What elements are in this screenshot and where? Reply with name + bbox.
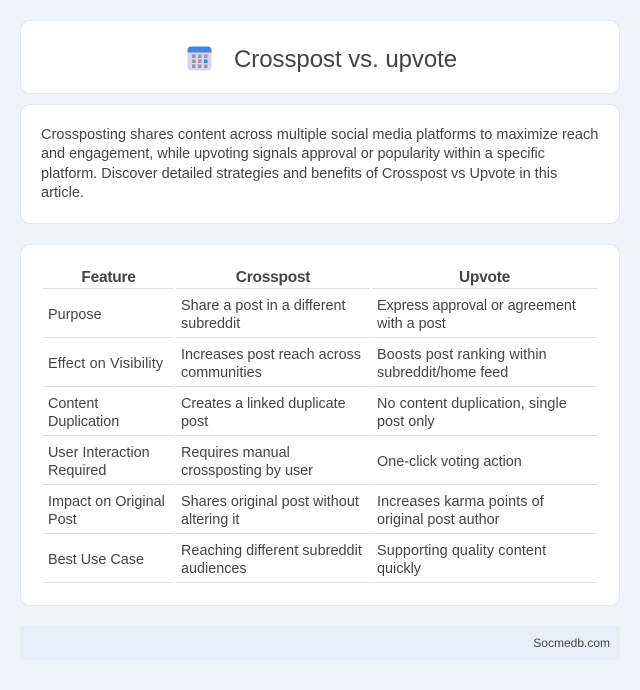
icon: calendar [188, 46, 212, 70]
row: Purpose: with a post [377, 316, 446, 332]
intro text: Crossposting shares content across multiple social media platforms to maximize reach [41, 126, 598, 142]
panel: intro text card [20, 104, 620, 224]
row: Best Use Case: Supporting quality content [377, 543, 546, 559]
row: User Interaction Required: User Interaction [48, 445, 150, 461]
row: Impact on Original Post: Impact on Original [48, 494, 165, 510]
table header row: Feature [81, 269, 136, 286]
row: Impact on Original Post: Shares original post without [181, 494, 359, 510]
table header row [81, 269, 510, 286]
row: User Interaction Required: Required [48, 463, 106, 479]
row: Best Use Case: audiences [181, 561, 247, 577]
row: Content Duplication: post only [377, 414, 435, 430]
title: Crosspost vs. upvote [234, 46, 457, 72]
row: Content Duplication: post [181, 414, 208, 430]
row: Effect on Visibility: Effect on Visibility [48, 356, 163, 372]
intro text: article. [41, 185, 84, 201]
footer bar [20, 626, 620, 660]
row: Effect on Visibility [48, 347, 547, 381]
row: User Interaction Required: Requires manual [181, 445, 290, 461]
intro text [41, 126, 598, 201]
row: Content Duplication: Content [48, 396, 98, 412]
row: Impact on Original Post: altering it [181, 512, 239, 528]
row: User Interaction Required [48, 445, 522, 479]
panel: title card [20, 20, 620, 94]
row: Content Duplication: No content duplication, single [377, 396, 567, 412]
row: Purpose: Purpose [48, 307, 102, 323]
row: Best Use Case [48, 543, 546, 577]
row: Purpose: Express approval or agreement [377, 298, 576, 314]
row: Best Use Case: Reaching different subreddit [181, 543, 362, 559]
row: Purpose: subreddit [181, 316, 240, 332]
row: Effect on Visibility: Increases post reach across [181, 347, 361, 363]
row: Effect on Visibility: Boosts post ranking within [377, 347, 547, 363]
row: Purpose: Share a post in a different [181, 298, 346, 314]
row: Effect on Visibility: communities [181, 365, 262, 381]
table header row: Crosspost [236, 269, 310, 286]
row: Impact on Original Post: Post [48, 512, 77, 528]
row: Impact on Original Post: original post author [377, 512, 499, 528]
row: Purpose [48, 298, 576, 332]
intro text: platform. Discover detailed strategies and benefits of Crosspost vs Upvote in this [41, 166, 557, 182]
row: Content Duplication [48, 396, 567, 430]
row: Impact on Original Post [48, 494, 544, 528]
row: User Interaction Required: One-click voting action [377, 454, 522, 470]
table header row: Upvote [459, 269, 510, 286]
panel: comparison table [20, 244, 620, 606]
row: Effect on Visibility: subreddit/home feed [377, 365, 508, 381]
intro text: and engagement, while upvoting signals approval or popularity within a specific [41, 146, 545, 162]
footer source text: Socmedb.com [533, 636, 610, 650]
row: Content Duplication: Creates a linked duplicate [181, 396, 346, 412]
row: Content Duplication: Duplication [48, 414, 119, 430]
row: User Interaction Required: crossposting by user [181, 463, 313, 479]
row: Impact on Original Post: Increases karma points of [377, 494, 544, 510]
row: Best Use Case: quickly [377, 561, 421, 577]
row: Best Use Case: Best Use Case [48, 552, 144, 568]
